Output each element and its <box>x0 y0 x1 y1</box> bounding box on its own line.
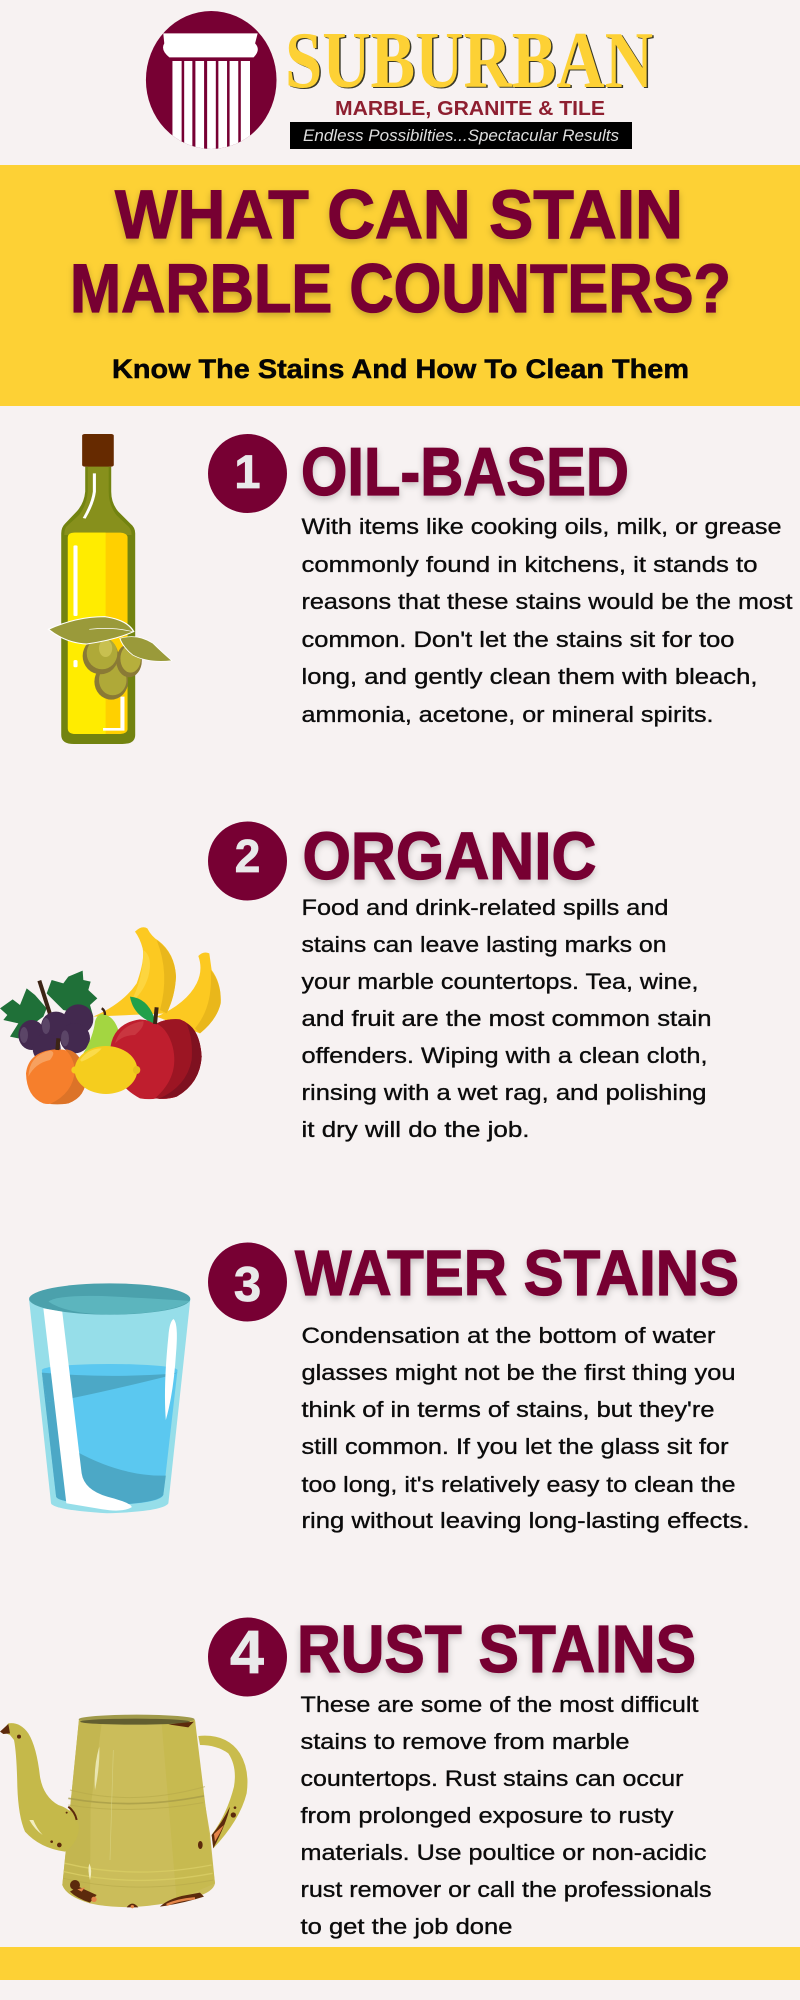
icon: glass of water <box>29 1283 190 1513</box>
logo wordmark: SUBURBAN <box>285 17 653 105</box>
number badge 2: 2 <box>235 830 260 882</box>
body text: from prolonged exposure to rusty <box>300 1803 674 1828</box>
icon: column emblem <box>146 11 277 151</box>
panel: rust stains <box>0 1612 712 1939</box>
number badge 3: 3 <box>234 1258 261 1312</box>
logo wordmark: SUBURBAN <box>286 18 654 106</box>
body text: Condensation at the bottom of water <box>302 1323 716 1348</box>
number badge 4: 4 <box>230 1618 264 1686</box>
body text: rust remover or call the professionals <box>300 1877 712 1902</box>
body text: long, and gently clean them with bleach, <box>302 664 758 689</box>
title: MARBLE COUNTERS? <box>70 250 731 327</box>
body text: common. Don't let the stains sit for too <box>302 627 734 652</box>
icon: olive oil bottle <box>48 434 172 744</box>
subtitle: Know The Stains And How To Clean Them <box>112 354 689 384</box>
number badge 4 <box>208 1618 287 1696</box>
body text <box>302 1323 750 1533</box>
panel: organic <box>0 819 712 1142</box>
footer band <box>0 1947 800 1980</box>
body text: countertops. Rust stains can occur <box>300 1766 684 1791</box>
panel: water stains <box>29 1237 749 1533</box>
body text: rinsing with a wet rag, and polishing <box>302 1080 706 1105</box>
body text: it dry will do the job. <box>302 1117 530 1142</box>
logo tagline: Endless Possibilties...Spectacular Results <box>303 126 619 145</box>
body text <box>300 1692 712 1939</box>
body text: too long, it's relatively easy to clean the <box>302 1472 736 1497</box>
number badge 1 <box>208 434 287 513</box>
panel: oil-based <box>48 434 793 744</box>
body text: think of in terms of stains, but they're <box>302 1397 714 1422</box>
body text <box>302 895 712 1142</box>
body text: These are some of the most difficult <box>300 1692 699 1717</box>
logo subtitle: MARBLE, GRANITE & TILE <box>335 98 605 120</box>
logo: Suburban Marble, Granite & Tile <box>146 11 655 151</box>
body text: reasons that these stains would be the most <box>302 589 793 614</box>
body text: and fruit are the most common stain <box>302 1006 712 1031</box>
heading: ORGANIC <box>302 819 596 894</box>
logo tagline <box>290 122 632 149</box>
icon: fruit pile <box>0 927 221 1104</box>
number badge 1: 1 <box>234 445 261 498</box>
number badge 3 <box>208 1242 287 1322</box>
title <box>70 176 731 327</box>
body text: stains can leave lasting marks on <box>302 932 666 957</box>
body text: With items like cooking oils, milk, or grease <box>302 514 782 539</box>
heading: OIL-BASED <box>301 434 629 510</box>
title banner <box>0 165 800 406</box>
body text: ammonia, acetone, or mineral spirits. <box>302 702 714 727</box>
body text: glasses might not be the first thing you <box>302 1360 736 1385</box>
body text <box>302 514 793 727</box>
body text: still common. If you let the glass sit for <box>302 1434 729 1459</box>
body text: materials. Use poultice or non-acidic <box>300 1840 706 1865</box>
body text: to get the job done <box>300 1914 512 1939</box>
body text: Food and drink-related spills and <box>302 895 668 920</box>
body text: commonly found in kitchens, it stands to <box>302 552 758 577</box>
body text: ring without leaving long-lasting effects. <box>302 1508 750 1533</box>
number badge 2 <box>208 822 287 900</box>
icon: rusty coffee pot <box>0 1715 247 1908</box>
heading: RUST STAINS <box>297 1612 696 1687</box>
body text: offenders. Wiping with a clean cloth, <box>302 1043 708 1068</box>
body text: your marble countertops. Tea, wine, <box>302 969 698 994</box>
body text: stains to remove from marble <box>300 1729 630 1754</box>
title: WHAT CAN STAIN <box>115 176 683 253</box>
heading: WATER STAINS <box>295 1237 739 1309</box>
